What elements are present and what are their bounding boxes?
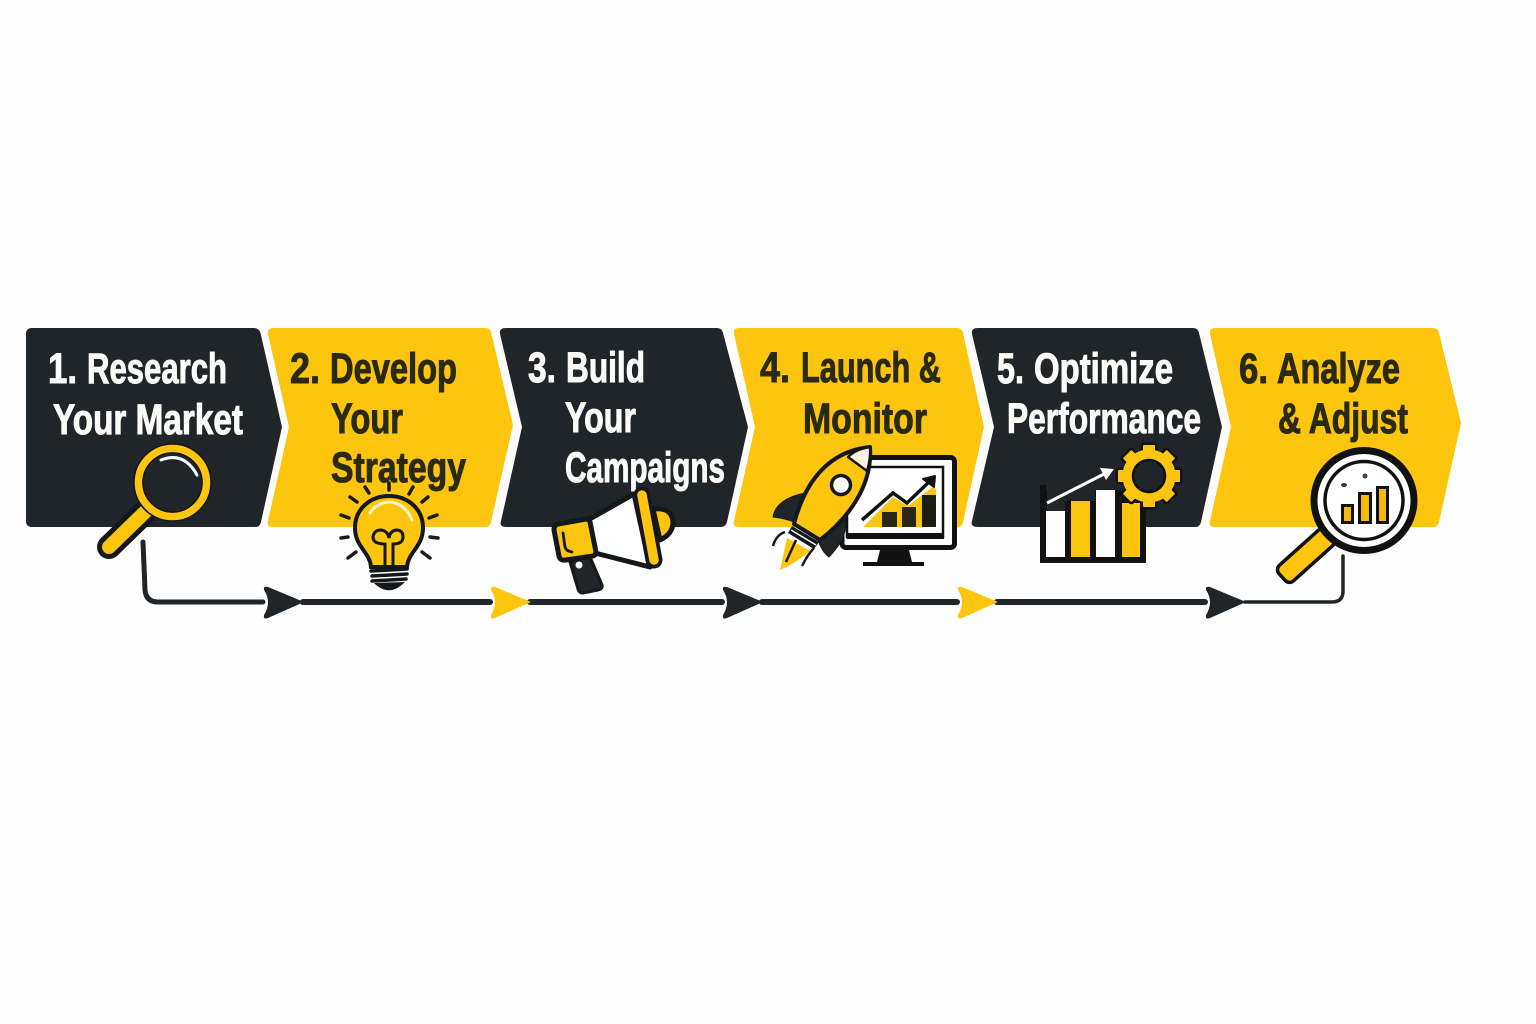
icon: megaphone xyxy=(554,494,673,593)
heading 3: Campaigns xyxy=(565,444,725,492)
icon: bar chart with gear xyxy=(1040,444,1181,563)
heading 5: Performance xyxy=(1007,395,1201,443)
heading 4: 4. xyxy=(760,344,790,392)
heading 5: 5. xyxy=(997,345,1024,393)
chevron shape 6 xyxy=(1210,328,1461,527)
heading 3: 3. xyxy=(528,344,556,392)
heading 2: Strategy xyxy=(331,444,466,492)
heading 2 xyxy=(290,345,466,492)
heading 6: & Adjust xyxy=(1278,395,1408,443)
heading 1: 1. xyxy=(48,345,77,393)
step 1 panel xyxy=(26,328,282,527)
chevron shape 3 xyxy=(500,328,748,527)
heading 6: 6. xyxy=(1239,345,1268,393)
heading 6 xyxy=(1239,345,1408,443)
gear xyxy=(1117,444,1181,508)
heading 1 xyxy=(48,345,243,444)
chevron shape 2 xyxy=(268,328,513,527)
icon: magnifying glass xyxy=(109,446,208,547)
heading 3: Your xyxy=(565,394,636,442)
heading 5 xyxy=(997,345,1201,443)
heading 4: Launch & xyxy=(801,344,941,392)
step 6 panel xyxy=(1210,328,1461,527)
arrowheads xyxy=(264,587,1246,619)
heading 3 xyxy=(528,344,725,492)
heading 6: Analyze xyxy=(1277,345,1400,393)
icon: magnifying glass with bars xyxy=(1275,450,1414,585)
heading 3: Build xyxy=(566,344,645,392)
heading 4: Monitor xyxy=(803,395,927,443)
icon: light bulb xyxy=(341,483,438,590)
heading 2: 2. xyxy=(290,345,320,393)
step 4 panel xyxy=(734,328,984,527)
heading 5: Optimize xyxy=(1034,345,1173,393)
heading 2: Your xyxy=(331,395,403,443)
heading 1: Research xyxy=(87,345,227,393)
step 2 panel xyxy=(268,328,513,527)
icon: monitor with chart xyxy=(842,458,954,566)
step 5 panel xyxy=(972,328,1222,527)
heading 4 xyxy=(760,344,941,443)
icon: rocket xyxy=(773,447,870,570)
heading 2: Develop xyxy=(330,345,457,393)
chevron shape 4 xyxy=(734,328,984,527)
heading 1: Your Market xyxy=(53,396,243,444)
flow arrow line xyxy=(143,542,1343,602)
step 3 panel xyxy=(500,328,748,527)
chevron shape 5 xyxy=(972,328,1222,527)
chevron shape 1 xyxy=(26,328,282,527)
